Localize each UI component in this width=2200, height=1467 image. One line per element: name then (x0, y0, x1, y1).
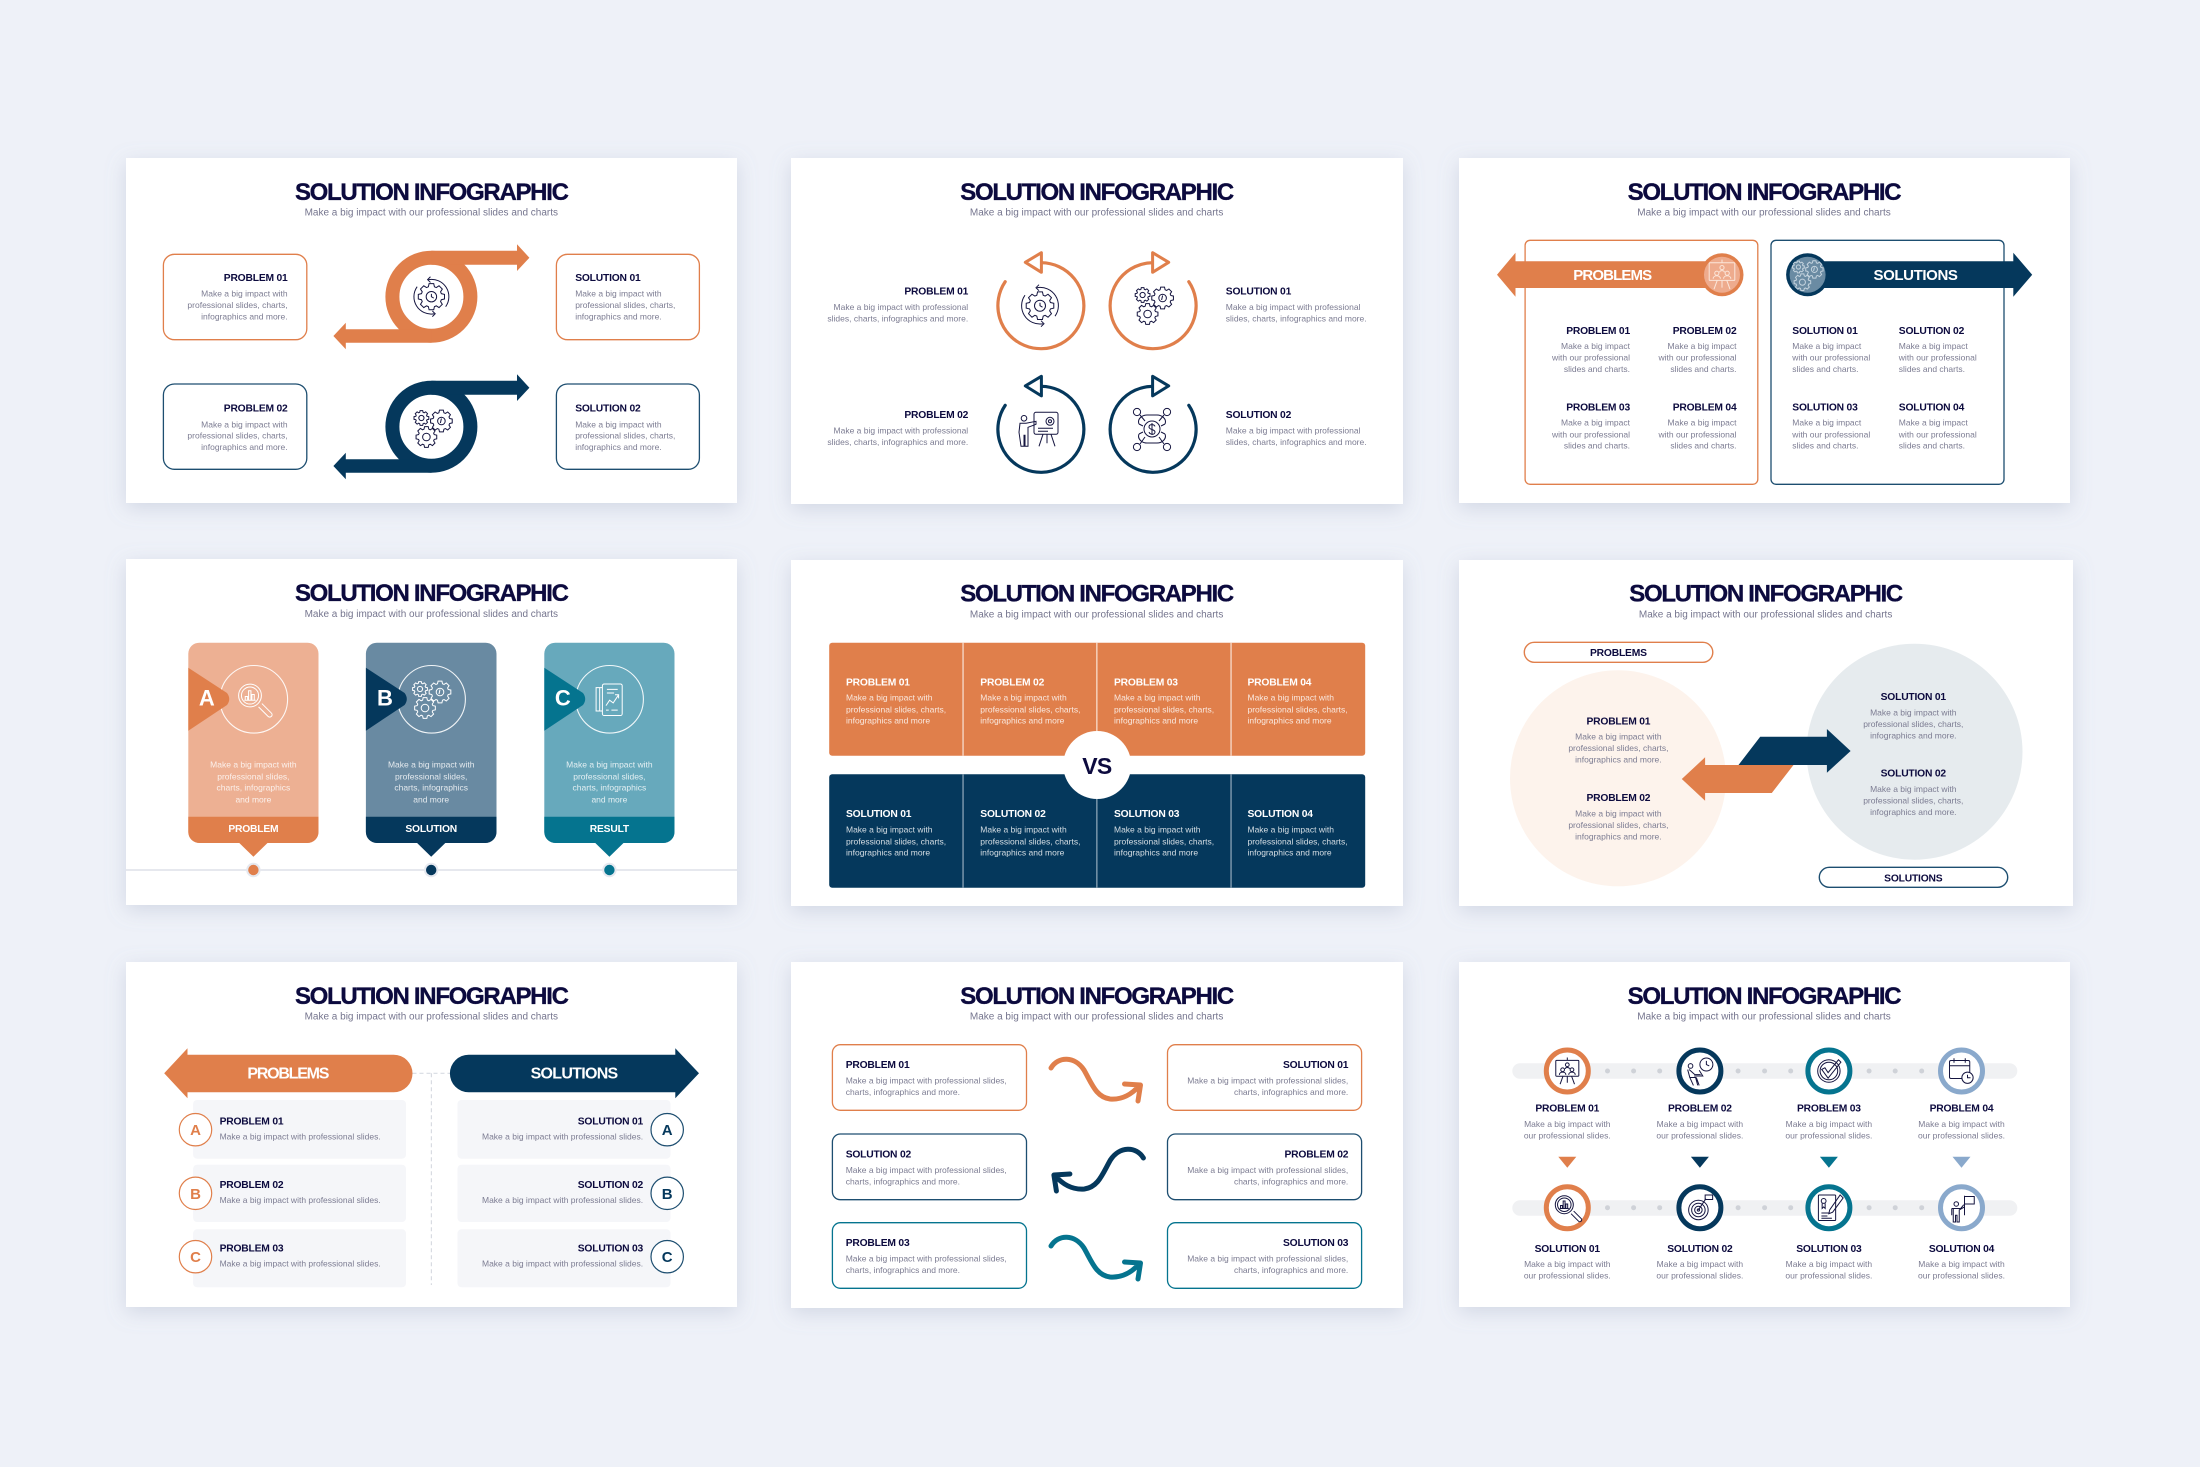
band: problems: Make a big impact with (846, 693, 933, 703)
row: problem C: PROBLEM 03 (220, 1243, 284, 1254)
card: problem 02: Make a big impact with (201, 419, 288, 429)
box: problems (1525, 240, 1758, 484)
arrow: problems banner: PROBLEMS (1573, 267, 1652, 284)
subtitle: Make a big impact with our professional slides and charts (1637, 208, 1891, 219)
band: solutions: Make a big impact with (980, 825, 1067, 835)
band: problems: professional slides, charts, (980, 704, 1080, 714)
band: problems: infographics and more (846, 716, 930, 726)
card: B solution: B (377, 686, 393, 711)
card: problem 01: professional slides, charts, (187, 300, 288, 310)
row: problem B: B (190, 1186, 201, 1203)
arrow: navy wave (1054, 1149, 1143, 1191)
card: problem 02: PROBLEM 02 (1284, 1149, 1349, 1160)
card: A problem (188, 643, 318, 857)
track: problems (1512, 1063, 2017, 1079)
row: problem B: Make a big impact with professional slides. (220, 1195, 381, 1205)
step: solution 04 (1918, 1187, 2005, 1281)
subtitle: Make a big impact with our professional slides and charts (970, 610, 1223, 621)
icon: gear clock (414, 277, 449, 317)
card: problem 01: PROBLEM 01 (846, 1060, 910, 1071)
panel: circular arrows (791, 158, 1403, 504)
card: C result: C (555, 686, 571, 711)
step: problem 04: Make a big impact with (1918, 1119, 2005, 1129)
dashed connector (412, 1073, 450, 1285)
card: problem 02: professional slides, charts, (187, 431, 288, 441)
band: solutions: professional slides, charts, (846, 836, 946, 846)
step: problem 02: PROBLEM 02 (1668, 1104, 1732, 1115)
band: problems: infographics and more (980, 716, 1065, 726)
text: solution 04: Make a big impact (1899, 418, 1968, 428)
card: solution 01 (556, 254, 699, 340)
card: solution 02 (556, 384, 699, 469)
icon: gears (1135, 287, 1173, 324)
title: SOLUTION INFOGRAPHIC (960, 581, 1234, 608)
title: SOLUTION INFOGRAPHIC (295, 580, 569, 607)
row: solution B: SOLUTION 02 (578, 1180, 644, 1191)
panel: two S-arrows (126, 158, 737, 503)
card: B solution: professional slides, (395, 771, 467, 781)
card: C result: Make a big impact with (566, 760, 653, 770)
card: problem 01: charts, infographics and more. (846, 1087, 960, 1097)
card: solution 02: charts, infographics and more. (846, 1177, 960, 1187)
panel: problems and solutions boxes (1459, 158, 2070, 503)
arrow: orange wave (1051, 1059, 1140, 1101)
card: solution 03: Make a big impact with professional slides, (1187, 1254, 1348, 1264)
card: problem 01 (163, 254, 307, 340)
card: C result: and more (591, 794, 628, 804)
step: solution 04: SOLUTION 04 (1929, 1244, 1995, 1255)
band: solutions: Make a big impact with (846, 825, 933, 835)
card: problem 03: charts, infographics and more. (846, 1265, 960, 1275)
text: solution 02: SOLUTION 02 (1899, 326, 1965, 337)
step: solution 02: SOLUTION 02 (1667, 1244, 1733, 1255)
title: SOLUTION INFOGRAPHIC (295, 983, 569, 1010)
band: problems: professional slides, charts, (1114, 704, 1214, 714)
card: solution 02: Make a big impact with (575, 419, 662, 429)
step: problem 03: PROBLEM 03 (1797, 1104, 1861, 1115)
step: solution 02 (1656, 1187, 1743, 1281)
step: solution 01: our professional slides. (1524, 1271, 1611, 1281)
card: B solution: charts, infographics (394, 783, 468, 793)
step: problem 01 (1524, 1050, 1611, 1168)
band: problems: professional slides, charts, (1248, 704, 1348, 714)
card: A problem: and more (235, 794, 272, 804)
icon: gears (414, 410, 452, 447)
circle: problems: professional slides, charts, (1568, 743, 1668, 753)
badge: VS (1063, 731, 1131, 799)
card: problem 02: infographics and more. (201, 442, 288, 452)
text: problem 01 (827, 286, 969, 323)
panel: problems and solutions lists (126, 962, 737, 1307)
pill: problems: PROBLEMS (1590, 648, 1647, 659)
text: solution 02 (1226, 410, 1367, 447)
card: A problem: PROBLEM (228, 824, 278, 835)
text: solution 01: Make a big impact with professional (1226, 302, 1361, 312)
panel: dual timeline (1459, 962, 2070, 1307)
step: solution 04: Make a big impact with (1918, 1259, 2005, 1269)
band: problems: PROBLEM 03 (1114, 677, 1178, 688)
card: C result (544, 643, 674, 857)
circle: problems: infographics and more. (1575, 831, 1662, 841)
band: solutions: SOLUTION 03 (1114, 809, 1180, 820)
step: problem 04: our professional slides. (1918, 1130, 2005, 1140)
circle: solutions: Make a big impact with (1870, 707, 1957, 717)
circle: problems: PROBLEM 02 (1586, 793, 1651, 804)
text: problem 02: PROBLEM 02 (904, 410, 969, 421)
card: problem 02 (163, 384, 307, 469)
row: problem A: Make a big impact with professional slides. (220, 1131, 381, 1141)
circle: problems: professional slides, charts, (1568, 820, 1668, 830)
text: problem 01: slides, charts, infographics and more. (827, 313, 968, 323)
band: problems: infographics and more (1114, 716, 1198, 726)
step: problem 03: Make a big impact with (1786, 1119, 1872, 1129)
text: solution 01: Make a big impact (1792, 341, 1862, 351)
card: problem 02: charts, infographics and more. (1234, 1177, 1348, 1187)
row: solution A: A (662, 1122, 673, 1139)
row: solution A (458, 1100, 683, 1159)
card: solution 01: professional slides, charts, (575, 300, 675, 310)
text: problem 02 (827, 410, 969, 447)
circle: solutions: SOLUTION 01 (1881, 692, 1946, 703)
text: problem 01: with our professional (1551, 353, 1630, 363)
card: B solution: and more (413, 794, 449, 804)
title: SOLUTION INFOGRAPHIC (1628, 179, 1901, 206)
card: A problem: Make a big impact with (210, 760, 297, 770)
card: C result: professional slides, (573, 771, 646, 781)
subtitle: Make a big impact with our professional slides and charts (970, 1012, 1223, 1023)
band: solutions: infographics and more (980, 848, 1065, 858)
row: problem A: A (190, 1122, 201, 1139)
text: solution 01: SOLUTION 01 (1226, 286, 1292, 297)
text: problem 02: with our professional (1658, 353, 1737, 363)
text: solution 03: slides and charts. (1792, 441, 1858, 451)
band: solutions (829, 774, 1365, 888)
text: problem 04: PROBLEM 04 (1673, 402, 1737, 413)
text: solution 04: slides and charts. (1899, 441, 1965, 451)
card: solution 02: SOLUTION 02 (846, 1149, 911, 1160)
card: B solution (366, 643, 496, 857)
card: A problem: professional slides, (217, 771, 290, 781)
subtitle: Make a big impact with our professional slides and charts (305, 609, 558, 620)
band: problems: Make a big impact with (1114, 693, 1201, 703)
card: solution 01: Make a big impact with professional slides, (1187, 1075, 1348, 1085)
arrow: solutions banner: SOLUTIONS (1874, 267, 1958, 284)
arrow: orange loop right (1110, 253, 1196, 349)
band: solutions: professional slides, charts, (1248, 836, 1348, 846)
band: problems: PROBLEM 04 (1248, 677, 1312, 688)
text: solution 01 (1226, 286, 1367, 323)
arrow: orange S-arrow (333, 244, 529, 349)
step: problem 02 (1656, 1050, 1743, 1168)
card: solution 01 (1168, 1045, 1362, 1110)
step: problem 02: Make a big impact with (1657, 1119, 1743, 1129)
step: solution 04: our professional slides. (1918, 1271, 2005, 1281)
row: problem C (179, 1229, 406, 1287)
band: solutions: infographics and more (1114, 848, 1198, 858)
arrow: solutions banner (1786, 253, 2032, 297)
title: SOLUTION INFOGRAPHIC (295, 179, 569, 206)
text: solution 04: SOLUTION 04 (1899, 402, 1965, 413)
text: problem 02 (1658, 326, 1737, 374)
text: solution 01: slides and charts. (1792, 364, 1858, 374)
row: problem B: PROBLEM 02 (220, 1180, 284, 1191)
text: solution 02: SOLUTION 02 (1226, 410, 1292, 421)
text: problem 01: Make a big impact (1561, 341, 1631, 351)
band: solutions: Make a big impact with (1114, 825, 1201, 835)
timeline dot: problem (246, 863, 261, 877)
text: problem 03: PROBLEM 03 (1566, 402, 1630, 413)
step: solution 03: Make a big impact with (1786, 1259, 1872, 1269)
timeline (126, 869, 737, 871)
circle: problems: PROBLEM 01 (1586, 716, 1651, 727)
text: solution 03 (1791, 402, 1870, 451)
band: problems (829, 643, 1365, 756)
band: solutions: infographics and more (846, 848, 930, 858)
band: problems: Make a big impact with (980, 693, 1067, 703)
card: problem 01: PROBLEM 01 (224, 273, 288, 284)
subtitle: Make a big impact with our professional slides and charts (970, 208, 1223, 219)
band: problems: infographics and more (1248, 716, 1332, 726)
row: solution B: Make a big impact with professional slides. (482, 1195, 643, 1205)
card: B solution: Make a big impact with (388, 760, 475, 770)
text: problem 03: slides and charts. (1564, 441, 1630, 451)
card: solution 01: charts, infographics and more. (1234, 1087, 1348, 1097)
pill: solutions: SOLUTIONS (1884, 873, 1943, 884)
step: problem 01: Make a big impact with (1524, 1119, 1611, 1129)
text: solution 02: with our professional (1898, 353, 1977, 363)
band: problems: professional slides, charts, (846, 704, 946, 714)
panel: A B C cards (126, 559, 737, 905)
text: problem 01 (1551, 326, 1631, 374)
text: problem 01: slides and charts. (1564, 364, 1630, 374)
band: solutions: SOLUTION 04 (1248, 809, 1313, 820)
band: problems: PROBLEM 01 (846, 677, 910, 688)
band: solutions: SOLUTION 02 (980, 809, 1046, 820)
text: solution 02: Make a big impact (1899, 341, 1968, 351)
step: problem 03: our professional slides. (1785, 1130, 1872, 1140)
text: problem 03: with our professional (1551, 429, 1630, 439)
timeline dot: result (602, 863, 617, 877)
row: solution C: SOLUTION 03 (578, 1243, 644, 1254)
text: problem 02: slides, charts, infographics and more. (827, 437, 968, 447)
band: solutions: SOLUTION 01 (846, 809, 912, 820)
text: problem 01: PROBLEM 01 (904, 286, 969, 297)
arrow: navy loop left (998, 376, 1084, 472)
text: problem 04: with our professional (1658, 429, 1737, 439)
text: solution 02: slides and charts. (1899, 364, 1965, 374)
card: problem 01: infographics and more. (201, 311, 288, 321)
subtitle: Make a big impact with our professional slides and charts (305, 1012, 558, 1023)
text: solution 02: Make a big impact with professional (1226, 426, 1361, 436)
arrow: orange left (1682, 757, 1794, 801)
arrow: solutions banner: SOLUTIONS (531, 1066, 619, 1083)
row: solution B (458, 1165, 683, 1222)
title: SOLUTION INFOGRAPHIC (960, 179, 1234, 206)
step: solution 03 (1785, 1187, 1872, 1281)
text: solution 01: with our professional (1791, 353, 1870, 363)
subtitle: Make a big impact with our professional slides and charts (1637, 1012, 1891, 1023)
row: problem C: C (190, 1249, 201, 1266)
text: problem 04 (1658, 402, 1737, 451)
band: solutions: professional slides, charts, (1114, 836, 1214, 846)
row: problem A (179, 1100, 406, 1159)
card: A problem: A (199, 686, 215, 711)
arrow: navy loop right (1110, 376, 1196, 472)
row: problem C: Make a big impact with professional slides. (220, 1258, 381, 1268)
band: solutions: professional slides, charts, (980, 836, 1080, 846)
card: solution 03: SOLUTION 03 (1283, 1238, 1349, 1249)
circle: solutions: infographics and more. (1870, 807, 1957, 817)
circle: solutions: Make a big impact with (1870, 784, 1957, 794)
text: problem 02: Make a big impact with professional (834, 426, 968, 436)
icon: team money (1133, 408, 1171, 451)
circle: problems: Make a big impact with (1575, 731, 1662, 741)
card: problem 02: Make a big impact with professional slides, (1187, 1165, 1348, 1175)
row: solution A: Make a big impact with professional slides. (482, 1131, 643, 1141)
title: SOLUTION INFOGRAPHIC (1628, 983, 1901, 1010)
text: solution 01: SOLUTION 01 (1792, 326, 1858, 337)
track: solutions (1512, 1200, 2017, 1216)
pill: solutions (1819, 867, 2008, 887)
circle: solutions: professional slides, charts, (1863, 796, 1963, 806)
text: problem 02: PROBLEM 02 (1673, 326, 1737, 337)
row: solution B: B (662, 1186, 673, 1203)
pill: problems (1524, 642, 1713, 662)
arrow: teal wave (1051, 1237, 1140, 1279)
arrow: problems banner: PROBLEMS (247, 1066, 330, 1083)
box: solutions (1771, 240, 2004, 484)
timeline dot: solution (424, 863, 438, 877)
step: problem 02: our professional slides. (1656, 1130, 1743, 1140)
panel: overlapping circles (1459, 560, 2073, 906)
card: C result: charts, infographics (573, 783, 646, 793)
circle: problems: infographics and more. (1575, 754, 1662, 764)
arrow: navy right (1738, 729, 1851, 773)
text: problem 01: PROBLEM 01 (1566, 326, 1630, 337)
card: problem 02: PROBLEM 02 (224, 404, 288, 415)
card: B solution: SOLUTION (405, 824, 457, 835)
circle: solutions (1806, 644, 2022, 860)
circle: solutions: professional slides, charts, (1863, 719, 1963, 729)
subtitle: Make a big impact with our professional slides and charts (305, 208, 558, 219)
text: problem 03 (1551, 402, 1631, 451)
circle: problems (1510, 670, 1726, 886)
arrow: navy S-arrow (333, 374, 529, 479)
row: problem B (179, 1165, 406, 1222)
text: solution 01 (1791, 326, 1870, 374)
row: problem A: PROBLEM 01 (220, 1116, 284, 1127)
band: problems: Make a big impact with (1248, 693, 1334, 703)
card: problem 01 (832, 1045, 1026, 1110)
circle: solutions: SOLUTION 02 (1881, 769, 1946, 780)
card: problem 03 (832, 1223, 1026, 1288)
card: solution 02 (832, 1134, 1026, 1200)
text: solution 02 (1898, 326, 1977, 374)
text: problem 01: Make a big impact with professional (834, 302, 968, 312)
text: solution 03: Make a big impact (1792, 418, 1862, 428)
row: solution C: Make a big impact with professional slides. (482, 1258, 643, 1268)
step: solution 02: Make a big impact with (1657, 1259, 1743, 1269)
card: solution 01: Make a big impact with (575, 289, 662, 299)
icon: gear clock (1022, 285, 1058, 327)
card: problem 03: Make a big impact with professional slides, (846, 1254, 1007, 1264)
card: solution 03 (1168, 1223, 1362, 1288)
step: problem 01: our professional slides. (1524, 1130, 1611, 1140)
step: problem 04 (1918, 1050, 2005, 1168)
step: solution 02: our professional slides. (1656, 1271, 1743, 1281)
icon: presenter (1019, 412, 1058, 446)
card: problem 02 (1168, 1134, 1362, 1200)
row: solution C (458, 1229, 683, 1287)
card: problem 01: Make a big impact with (201, 289, 288, 299)
arrow: orange loop left (998, 253, 1084, 349)
text: solution 03: with our professional (1791, 429, 1870, 439)
text: problem 04: slides and charts. (1670, 441, 1736, 451)
step: problem 03 (1785, 1050, 1872, 1168)
step: solution 01 (1524, 1187, 1611, 1281)
band: solutions: infographics and more (1248, 848, 1332, 858)
text: solution 03: SOLUTION 03 (1792, 402, 1858, 413)
card: solution 02: Make a big impact with professional slides, (846, 1165, 1007, 1175)
text: solution 02: slides, charts, infographics and more. (1226, 437, 1367, 447)
card: problem 03: PROBLEM 03 (846, 1238, 910, 1249)
arrow: solutions banner (450, 1048, 699, 1098)
subtitle: Make a big impact with our professional slides and charts (1639, 610, 1892, 621)
step: problem 04: PROBLEM 04 (1930, 1104, 1994, 1115)
card: C result: RESULT (590, 824, 630, 835)
card: solution 01: infographics and more. (575, 311, 662, 321)
step: problem 01: PROBLEM 01 (1535, 1104, 1600, 1115)
row: solution A: SOLUTION 01 (578, 1116, 644, 1127)
card: solution 02: SOLUTION 02 (575, 404, 641, 415)
step: solution 03: our professional slides. (1785, 1271, 1872, 1281)
text: problem 04: Make a big impact (1668, 418, 1737, 428)
panel: wavy arrows (791, 962, 1403, 1308)
card: problem 01: Make a big impact with professional slides, (846, 1075, 1007, 1085)
row: solution C: C (662, 1249, 673, 1266)
text: solution 04 (1898, 402, 1977, 451)
text: problem 02: Make a big impact (1668, 341, 1737, 351)
card: solution 02: professional slides, charts, (575, 431, 675, 441)
step: solution 01: SOLUTION 01 (1535, 1244, 1600, 1255)
card: solution 03: charts, infographics and more. (1234, 1265, 1348, 1275)
card: A problem: charts, infographics (217, 783, 290, 793)
circle: solutions: infographics and more. (1870, 730, 1957, 740)
step: solution 03: SOLUTION 03 (1796, 1244, 1862, 1255)
card: solution 01: SOLUTION 01 (1283, 1060, 1349, 1071)
text: problem 03: Make a big impact (1561, 418, 1631, 428)
badge: VS: VS (1082, 753, 1112, 779)
title: SOLUTION INFOGRAPHIC (1629, 581, 1903, 608)
text: solution 01: slides, charts, infographics and more. (1226, 313, 1367, 323)
card: solution 02: infographics and more. (575, 442, 662, 452)
text: problem 02: slides and charts. (1670, 364, 1736, 374)
arrow: problems banner (1497, 253, 1744, 297)
card: solution 01: SOLUTION 01 (575, 273, 641, 284)
title: SOLUTION INFOGRAPHIC (960, 983, 1234, 1010)
arrow: problems banner (164, 1048, 413, 1098)
step: solution 01: Make a big impact with (1524, 1259, 1611, 1269)
band: problems: PROBLEM 02 (980, 677, 1045, 688)
panel: VS table (791, 560, 1403, 906)
band: solutions: Make a big impact with (1248, 825, 1334, 835)
text: solution 04: with our professional (1898, 429, 1977, 439)
circle: problems: Make a big impact with (1575, 808, 1662, 818)
